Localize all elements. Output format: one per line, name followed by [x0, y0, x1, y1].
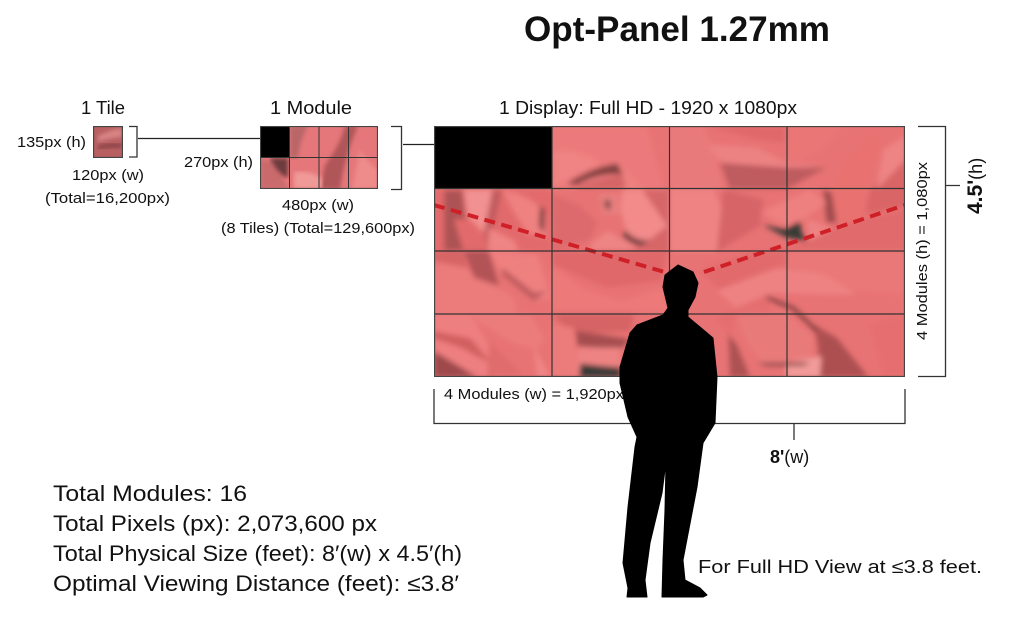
tile image	[93, 126, 123, 158]
height bracket	[918, 126, 960, 376]
label: tile width: 120px (w)	[72, 168, 144, 184]
width bracket	[434, 389, 905, 440]
connector: tile to module	[138, 138, 260, 140]
panel: 1 module	[184, 98, 415, 237]
tile bracket	[129, 126, 137, 157]
stat: total modules: Total Modules: 16	[53, 481, 247, 506]
stat: viewing distance: Optimal Viewing Distance (feet): ≤3.8′	[53, 571, 459, 596]
label: tile height: 135px (h)	[17, 135, 86, 151]
heading: 1 display: 1 Display: Full HD - 1920 x 1080px	[499, 98, 797, 118]
label: 4.5 feet height: 4.5'(h)	[964, 158, 987, 214]
stat: total pixels: Total Pixels (px): 2,073,600 px	[53, 511, 377, 536]
black module	[434, 126, 552, 188]
label: 8 feet width: 8'(w)	[770, 447, 809, 467]
label: display modules height: 4 Modules (h) = 1,080px	[915, 161, 931, 340]
stat: physical size: Total Physical Size (feet): 8′(w) x 4.5′(h)	[53, 541, 462, 566]
panel: display image with grid	[434, 126, 906, 377]
label: tile total: (Total=16,200px)	[45, 191, 170, 207]
label: display modules width: 4 Modules (w) = 1,920px	[444, 387, 625, 403]
panel: 1 tile	[17, 98, 170, 207]
module grid	[434, 126, 905, 377]
module bracket	[391, 126, 402, 190]
label: module height: 270px (h)	[184, 155, 253, 171]
silhouette of person	[620, 265, 717, 597]
title: Opt-Panel 1.27mm	[524, 10, 830, 49]
rose image	[434, 126, 906, 377]
connector: module to display	[403, 144, 434, 146]
summary stats	[53, 481, 462, 596]
heading: 1 tile: 1 Tile	[81, 98, 125, 118]
note: viewing distance: For Full HD View at ≤3.8 feet.	[698, 557, 982, 577]
label: module total: (8 Tiles) (Total=129,600px)	[221, 221, 415, 237]
module image	[260, 126, 378, 189]
viewing angle dashed line	[434, 205, 905, 273]
heading: 1 module: 1 Module	[270, 98, 352, 118]
label: module width: 480px (w)	[282, 198, 354, 214]
